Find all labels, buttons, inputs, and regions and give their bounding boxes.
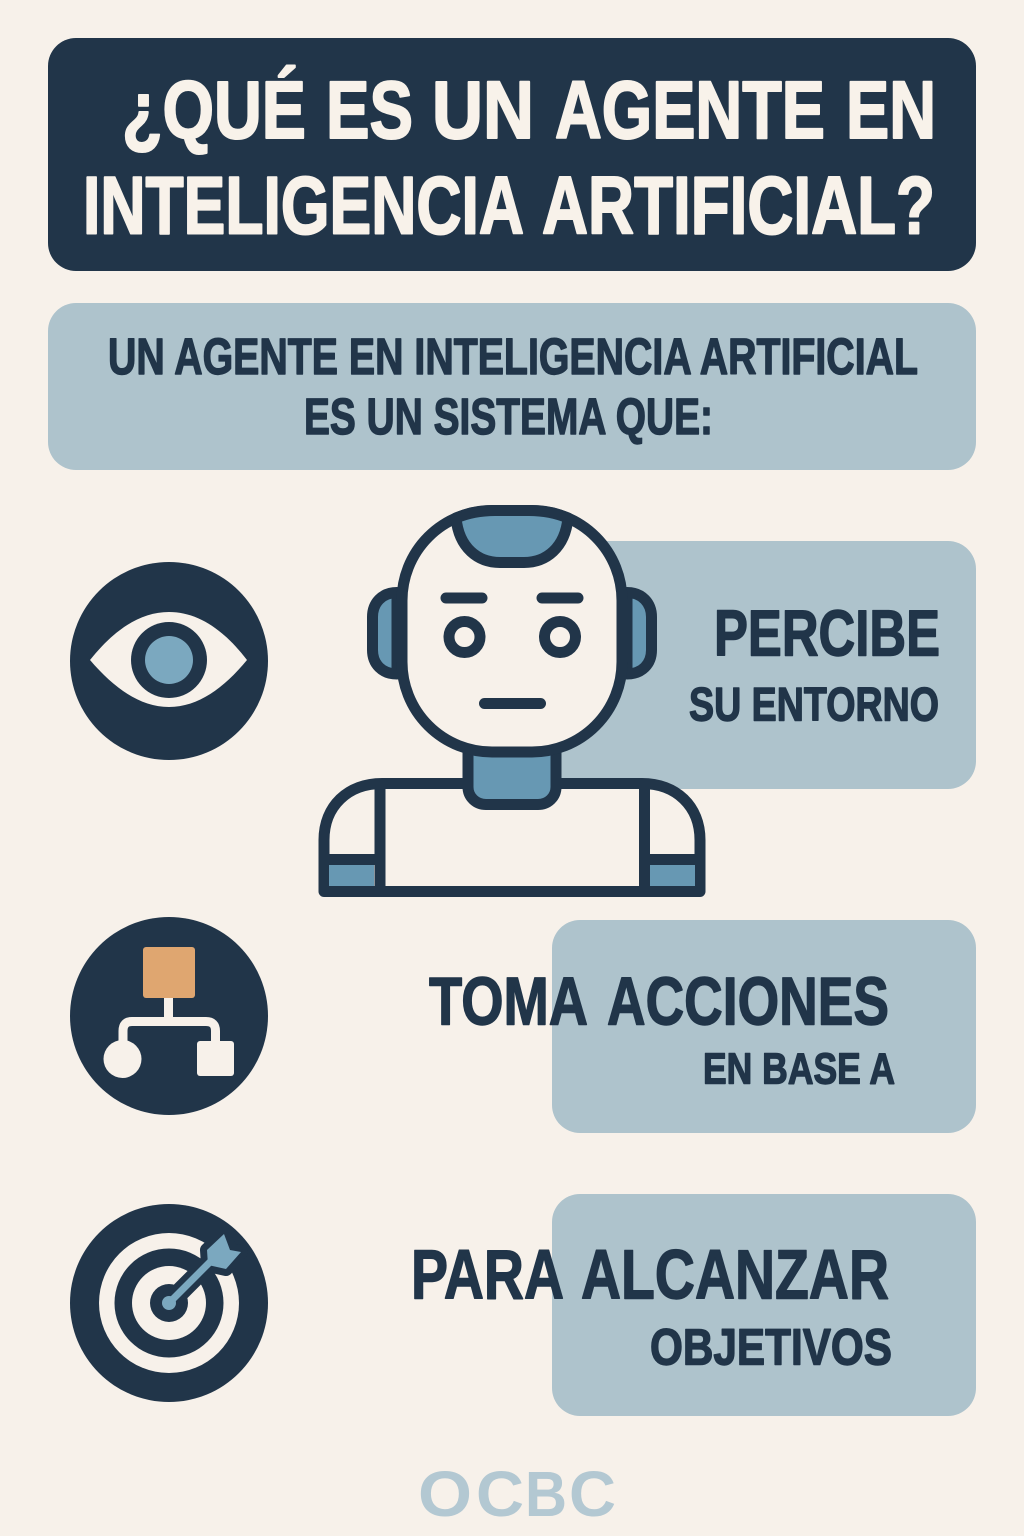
- robot hair: [456, 510, 568, 562]
- icon: target with arrow: [70, 1204, 268, 1402]
- subtitle panel: [48, 303, 976, 470]
- percibe text: SU ENTORNO: [689, 678, 939, 730]
- subtitle text: [108, 328, 918, 445]
- logo OCBC: C: [476, 1458, 524, 1530]
- title text: EN: [846, 65, 936, 156]
- para alcanzar text: OBJETIVOS: [650, 1318, 892, 1376]
- title text: ¿QUÉ: [122, 65, 306, 156]
- robot mouth: [484, 698, 540, 709]
- panel: percibe: [552, 541, 976, 789]
- percibe text: [689, 596, 940, 730]
- title text: INTELIGENCIA: [83, 160, 524, 252]
- para alcanzar text: PARA: [411, 1236, 564, 1314]
- toma acciones text: ACCIONES: [607, 964, 889, 1040]
- robot ears: [372, 592, 652, 674]
- robot eyebrows: [446, 592, 578, 604]
- toma acciones text: [429, 964, 895, 1094]
- title text: AGENTE: [555, 65, 825, 156]
- logo OCBC: [418, 1458, 616, 1530]
- title text: ES: [326, 65, 413, 156]
- panel: toma acciones: [429, 920, 976, 1133]
- panel: para alcanzar: [411, 1194, 976, 1416]
- logo OCBC: B: [525, 1458, 567, 1530]
- icon: decision tree: [70, 917, 268, 1115]
- para alcanzar text: ALCANZAR: [581, 1236, 889, 1314]
- toma acciones text: EN BASE A: [703, 1044, 895, 1094]
- robot neck: [468, 745, 556, 804]
- subtitle text: ES UN SISTEMA QUE:: [304, 388, 713, 445]
- para alcanzar text: [411, 1236, 892, 1376]
- icon: eye: [70, 562, 268, 760]
- robot eyes: [449, 622, 576, 652]
- robot head: [402, 510, 622, 752]
- icon: robot agent: [324, 510, 700, 892]
- title text: UN: [432, 65, 534, 156]
- toma acciones text: TOMA: [429, 964, 588, 1040]
- title text: [83, 65, 936, 252]
- logo OCBC: O: [418, 1458, 472, 1530]
- percibe text: PERCIBE: [714, 596, 940, 670]
- title banner: [48, 38, 976, 271]
- robot body: [324, 784, 700, 892]
- logo OCBC: C: [569, 1458, 616, 1530]
